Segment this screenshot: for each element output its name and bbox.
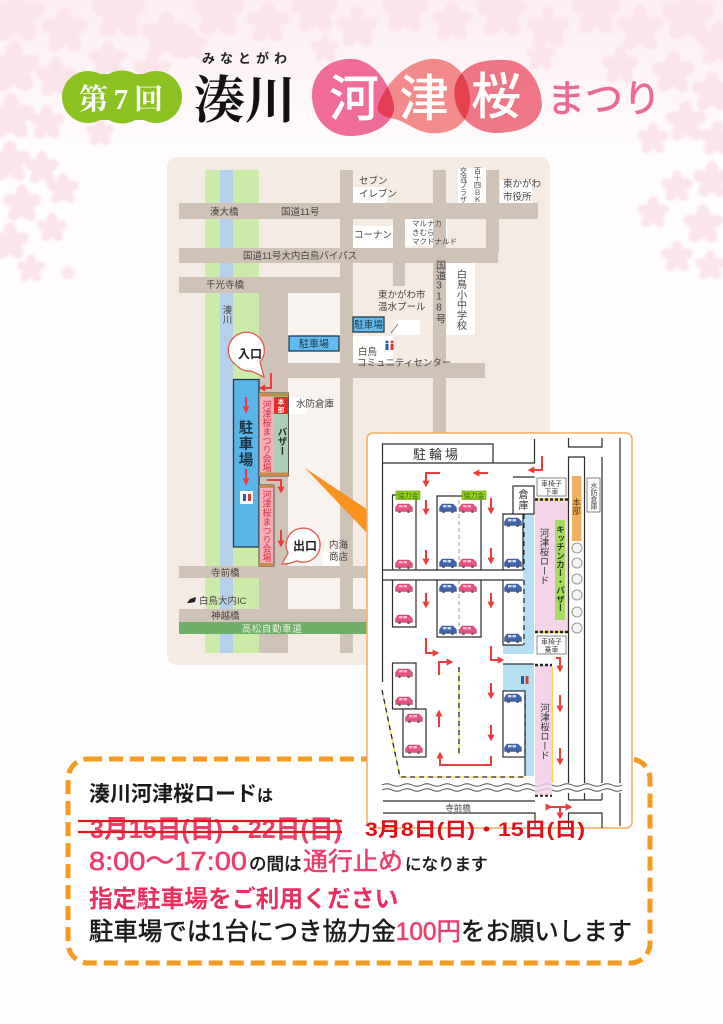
festival venue lower: 河津桜まつり会場 <box>262 489 272 563</box>
sakura road upper <box>535 500 568 632</box>
festival venue upper: 本 <box>278 397 285 406</box>
map labels: 市役所 <box>503 191 532 203</box>
headquarters tag <box>274 397 288 414</box>
festival venue upper <box>259 393 288 476</box>
map labels: 寺前橋 <box>211 567 240 579</box>
road network <box>179 170 538 653</box>
wheelchair stops: 乗車 <box>544 645 558 654</box>
main car park <box>234 380 259 547</box>
map labels: 白鳥 <box>358 346 378 358</box>
festival venue lower <box>259 485 274 566</box>
contribution tags: 協力金 <box>464 491 484 500</box>
contribution tags <box>396 491 486 500</box>
map labels: コミュニティセンター <box>357 358 451 369</box>
map labels: 国道11号 <box>281 206 320 218</box>
map labels: きむら <box>412 228 434 237</box>
map labels: セブン <box>359 175 388 187</box>
wheelchair stops: 車椅子 <box>541 637 562 646</box>
headquarters strip <box>572 476 582 541</box>
festival venue upper: バザー <box>276 427 287 456</box>
callout: 入口: 入口 <box>238 347 262 361</box>
callout: 出口 <box>282 528 320 564</box>
expressway <box>179 622 369 635</box>
road closure hours: の間は <box>249 854 302 874</box>
wheelchair stops <box>537 478 566 654</box>
festival venue upper: 河津桜まつり会場 <box>262 399 272 473</box>
notice: cancelled dates: 3月15日(日)・22日(日) <box>90 814 342 844</box>
pointer to detail map <box>305 468 368 534</box>
festival venue upper: 部 <box>278 405 285 414</box>
blob trio: 河津桜 <box>312 59 542 136</box>
small car park labels: 駐車場 <box>354 319 383 331</box>
main car park: 駐 <box>239 419 254 437</box>
cars <box>396 504 522 754</box>
map labels: イレブン <box>359 188 397 200</box>
map labels: 白鳥小中学校 <box>454 268 467 331</box>
map labels: 百十四ＢＫ <box>474 167 482 203</box>
map labels: 湊川 <box>220 304 232 324</box>
map labels: 交流プラザ <box>460 167 468 203</box>
map labels: 千光寺橋 <box>206 279 245 291</box>
bicycle parking <box>382 444 493 463</box>
tent circles <box>572 543 582 633</box>
main car park: 車 <box>239 436 253 453</box>
right-hand roads <box>568 438 620 828</box>
storehouse <box>513 486 534 514</box>
storehouse: 倉 <box>518 489 528 501</box>
expressway: 高松自動車道 <box>242 623 302 635</box>
map labels: 東かがわ <box>503 178 541 190</box>
traffic arrows on map <box>261 373 281 545</box>
notice text lines <box>89 819 632 946</box>
map labels: 商店 <box>329 551 349 563</box>
blob trio: 河津桜: 津 <box>399 71 449 127</box>
bicycle parking: 駐輪場 <box>413 447 461 462</box>
road closure hours: 8:00〜17:00 <box>89 846 247 876</box>
road closure hours: になります <box>405 855 488 874</box>
bridge: 寺前橋: 寺前橋 <box>445 803 471 813</box>
map labels: 東かがわ市 <box>378 289 426 301</box>
title suffix: まつり: まつり <box>547 79 661 121</box>
map labels: 内海 <box>329 539 349 551</box>
map labels: マルナカ <box>412 219 442 228</box>
map labels: 白鳥大内IC <box>199 595 247 607</box>
red flow arrows <box>426 456 570 817</box>
white building blocks <box>288 168 532 609</box>
road closure hours <box>89 846 488 876</box>
map labels: 湊大橋 <box>210 206 239 218</box>
headquarters strip: 本部 <box>572 497 582 516</box>
bridge: 寺前橋 <box>383 801 535 828</box>
blob trio: 河津桜: 河 <box>329 71 379 127</box>
small car park labels <box>289 317 384 351</box>
detail map panel <box>367 433 632 828</box>
callout: 出口: 出口 <box>293 539 317 553</box>
toilet icon <box>386 340 394 350</box>
parking instruction: 指定駐車場をご利用ください <box>89 885 398 913</box>
map labels <box>187 167 541 622</box>
sakura road lower: 河津桜ロード <box>538 702 550 760</box>
map labels: 神越橋 <box>211 610 240 622</box>
title: 湊川: 湊川 <box>194 74 296 130</box>
notice: road name: 湊川河津桜ロードは <box>89 783 273 806</box>
contribution tags: 協力金 <box>398 491 418 500</box>
small car park labels: 駐車場 <box>299 338 329 350</box>
flood storehouse: 水防倉庫 <box>590 481 598 511</box>
map labels: 国道318号 <box>434 260 446 325</box>
road closure hours: 通行止め <box>303 848 403 876</box>
blob trio: 河津桜: 桜 <box>471 69 521 125</box>
map labels: コーナン <box>354 230 392 241</box>
title <box>62 51 661 136</box>
map labels: 国道11号大内白鳥バイパス <box>243 250 357 262</box>
kitchen car label <box>555 520 565 620</box>
river and banks <box>205 170 259 653</box>
map labels: マクドナルド <box>412 237 457 246</box>
area map panel <box>167 157 550 665</box>
sakura road lower <box>535 665 552 796</box>
sakura road upper: 河津桜ロード <box>538 527 549 585</box>
light blue zones <box>503 514 534 776</box>
new dates: 3月8日(日)・15日(日) <box>365 819 585 841</box>
furigana: みなとがわ: みなとがわ <box>202 51 287 66</box>
toilet icon <box>521 676 528 684</box>
edition badge: 第7回 <box>62 70 182 124</box>
map labels: 温水プール <box>378 301 426 313</box>
contribution fee: 駐車場では1台につき協力金100円をお願いします <box>89 918 632 946</box>
river crossing waves <box>382 783 624 793</box>
lot outlines <box>382 439 534 776</box>
callout: 入口 <box>228 332 264 377</box>
notice box <box>68 759 650 963</box>
map labels: 水防倉庫 <box>296 398 335 410</box>
edition badge: 第7回: 第7回 <box>79 83 163 116</box>
wheelchair stops: 下車 <box>544 487 558 496</box>
main car park: 場 <box>239 452 254 469</box>
sakura road upper: キッチンカー・バザー <box>555 525 565 612</box>
flood storehouse <box>587 478 600 512</box>
dashed boundary <box>382 514 525 777</box>
storehouse: 庫 <box>518 499 528 512</box>
wheelchair stops: 車椅子 <box>541 479 562 488</box>
